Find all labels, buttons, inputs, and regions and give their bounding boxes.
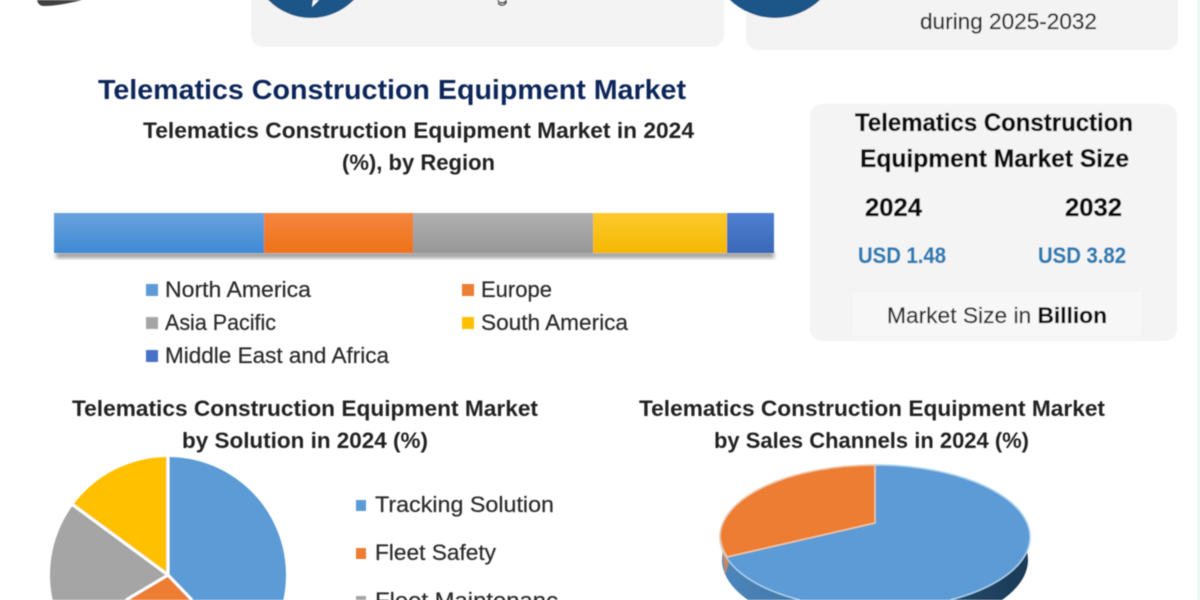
- title: Telematics Construction Equipment Market: [98, 74, 686, 105]
- legend: solution: Tracking Solution: [375, 492, 554, 517]
- panel: market size: [810, 104, 1177, 341]
- year 2032 value: [1038, 194, 1126, 268]
- legend: regions: Asia Pacific: [165, 310, 276, 335]
- unit note: Market Size in Billion: [887, 303, 1107, 328]
- legend: regions: Middle East and Africa: [165, 343, 390, 368]
- heading: solution pie: Telematics Construction Equipment Market: [72, 396, 539, 421]
- icon: blue circle left: [251, 0, 371, 18]
- heading: sales channels pie: by Sales Channels in 2024 (%): [714, 428, 1029, 453]
- heading: sales channels pie: Telematics Construction Equipment Market: [639, 396, 1106, 421]
- pie chart: sales channels: [720, 465, 1030, 600]
- right edge strip: [1197, 0, 1200, 600]
- heading: market size: Telematics Construction: [855, 109, 1133, 137]
- icon: blue circle right: [710, 0, 840, 18]
- heading: market size: [855, 109, 1133, 173]
- legend: regions: South America: [481, 310, 629, 335]
- heading: bar chart: [143, 118, 695, 175]
- heading: sales channels pie: [639, 396, 1106, 453]
- pie chart: solution: [50, 457, 286, 600]
- heading: solution pie: [72, 396, 539, 453]
- year 2024 value: [858, 194, 946, 268]
- panel: top left callout: [251, 0, 724, 47]
- legend: regions: North America: [165, 277, 312, 302]
- legend: solution: Fleet Safety: [375, 540, 496, 565]
- heading: market size: Equipment Market Size: [860, 145, 1129, 173]
- year 2032 value: 2032: [1065, 194, 1122, 222]
- heading: bar chart: Telematics Construction Equipment Market in 2024: [143, 118, 695, 143]
- logo fragment: [37, 0, 82, 6]
- text: forecast period: during 2025-2032: [920, 9, 1097, 34]
- year 2024 value: 2024: [865, 194, 922, 222]
- year 2032 value: USD 3.82: [1038, 243, 1126, 268]
- year 2024 value: USD 1.48: [858, 243, 946, 268]
- text fragment: [498, 0, 506, 5]
- legend: regions: Europe: [481, 277, 552, 302]
- bar chart: region share: [54, 213, 774, 258]
- heading: bar chart: (%), by Region: [342, 150, 495, 175]
- unit note: [851, 291, 1143, 337]
- heading: solution pie: by Solution in 2024 (%): [182, 428, 428, 453]
- legend: regions: [146, 277, 629, 368]
- panel: top right callout: [710, 0, 1178, 50]
- legend: solution: [356, 492, 558, 600]
